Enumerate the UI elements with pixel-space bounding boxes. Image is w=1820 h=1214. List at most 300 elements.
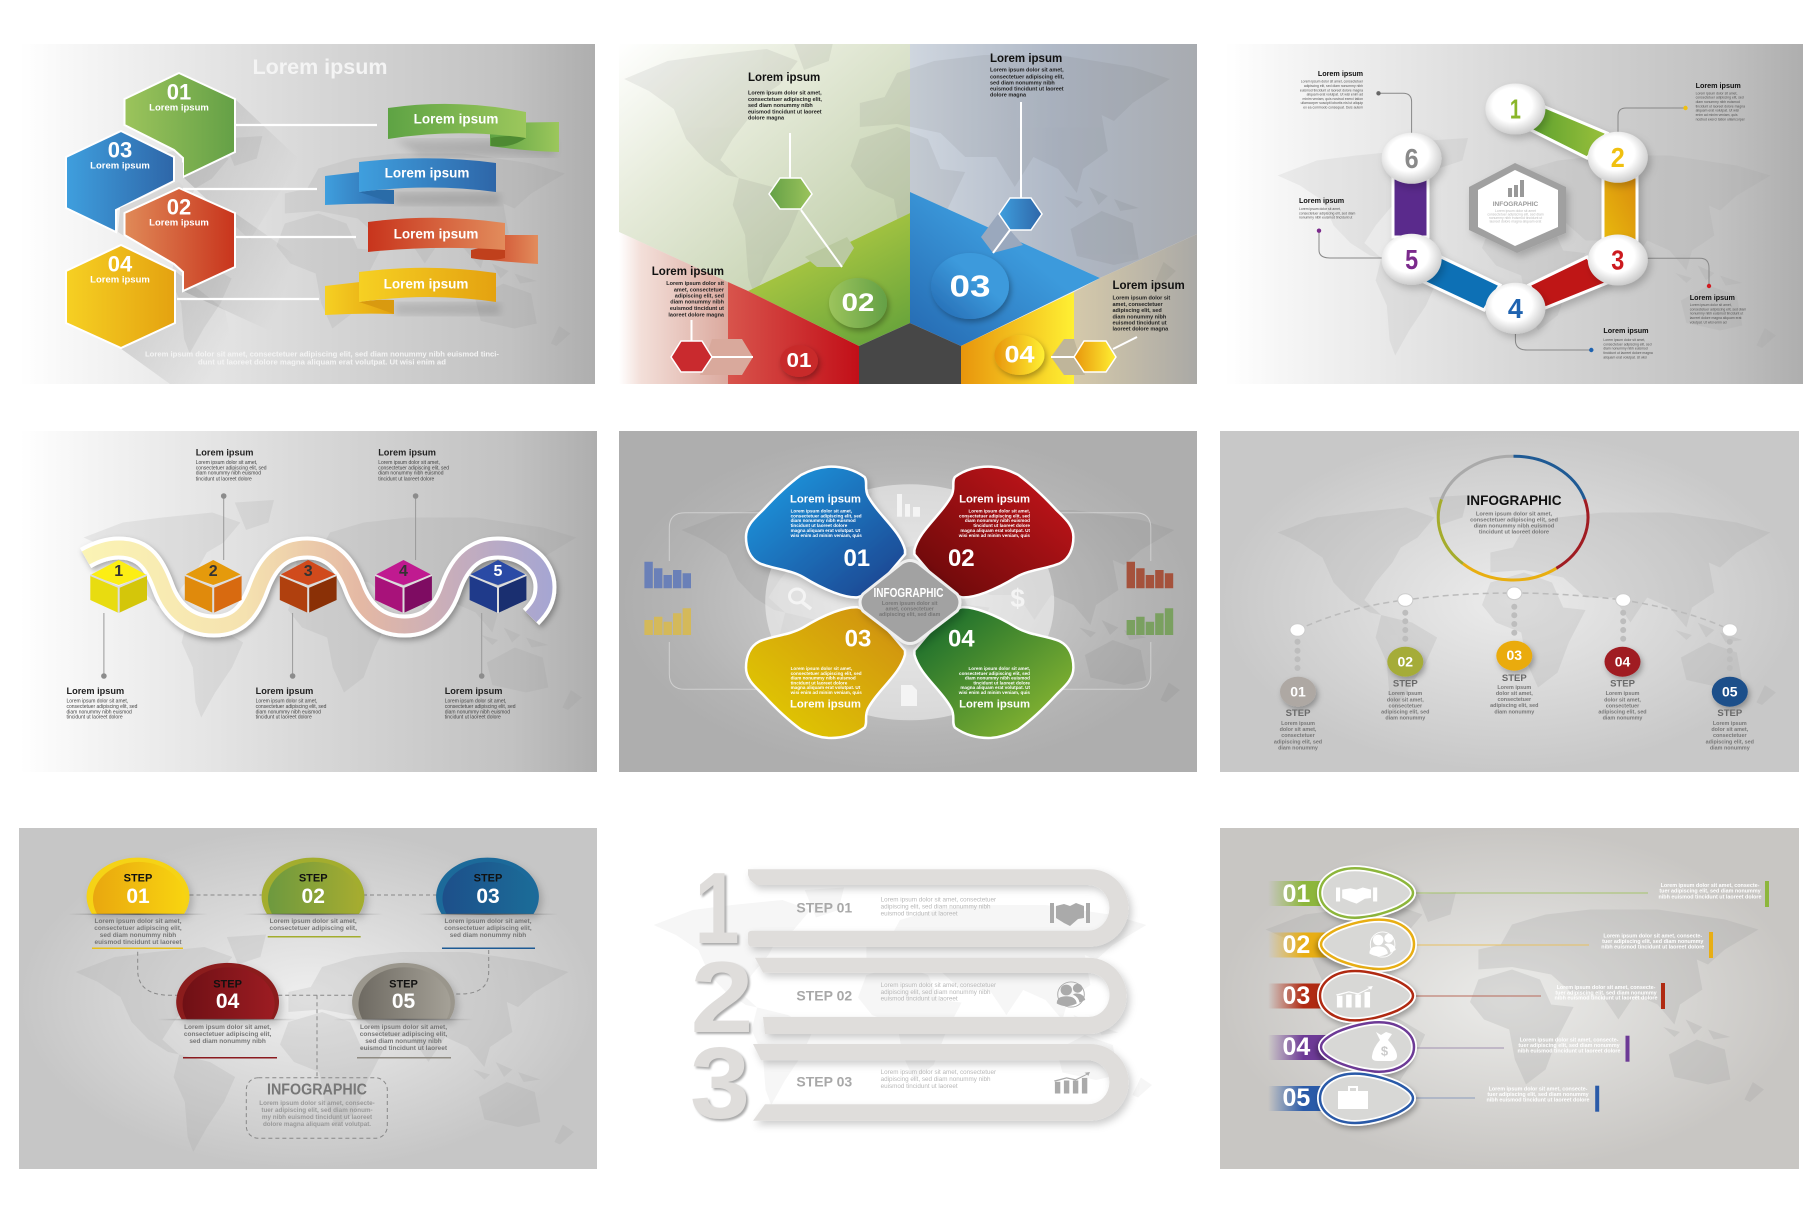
infographic note box: Lorem ipsum dolor sit amet, consecte- [259,1100,375,1107]
step 01: diam nonummy [1278,746,1318,752]
petal text 03: Lorem ipsum dolor sit amet, [791,666,852,671]
centre diamond: Lorem ipsum dolor sit [882,601,938,607]
cube 1: 1 [114,563,123,580]
step 05: adipiscing elit, sed [1706,739,1754,745]
ribbon: blue: Lorem ipsum [385,166,469,180]
ring text: INFOGRAPHIC [1466,492,1562,508]
side frame [669,513,1151,689]
step 03 text: euismod tincidunt ut laoreet [881,1083,958,1090]
row 05: Lorem ipsum dolor sit amet, consecte- [1489,1086,1588,1092]
callout 4: tincidunt ut laoreet dolore magna [1603,351,1653,355]
callout 2: diam nonummy nibh euismod [1696,100,1740,104]
text block 1 [66,686,138,721]
petal text 04: magna aliquam erat volutpat. Ut [960,685,1030,690]
text block: blue: dolore magna [990,93,1027,99]
petal text 02: magna aliquam erat volutpat. Ut [960,528,1030,533]
petal 01 [746,467,905,597]
step 01: 01 [1290,684,1306,700]
text block: yellow: Lorem ipsum dolor sit [1112,296,1170,302]
step 02: dolor sit amet, [1387,697,1424,703]
text block: yellow [1112,280,1185,333]
step 03 dome [418,858,558,949]
text block 2: tincidunt ut laoreet dolore [196,476,252,482]
arc nodes [1290,587,1737,636]
track 2: 2 [690,942,754,1054]
step 04 [1598,647,1647,722]
text block: green: consectetuer adipiscing elit, [748,97,822,103]
step 05 dome: 05 [392,990,415,1013]
callout 6: adipiscing elit, sed diam nonummy nibh [1304,84,1363,88]
text block 2: Lorem ipsum [196,448,253,458]
centre diamond: INFOGRAPHIC [874,585,944,600]
step 05: 05 [1722,684,1738,700]
callout 5: nonummy nibh euismod tincidunt ut [1299,216,1352,220]
hexagon 03 [66,131,183,232]
callout 3: nonummy nibh euismod tincidunt ut [1690,312,1743,316]
step 01: Lorem ipsum [1281,721,1315,727]
petal text 03: magna aliquam erat volutpat. Ut [791,685,861,690]
dotted stems [1294,604,1733,671]
petal 02 [914,467,1073,597]
panel: hexagonal cycle [1225,44,1803,384]
node 1 [1485,84,1545,134]
hexagon 02 [118,182,235,291]
step 04: dolor sit amet, [1604,697,1641,703]
petal text 04 [948,626,1030,710]
step 05 dome: Lorem ipsum dolor sit amet, [360,1024,447,1031]
callout 2: enim ad minim veniam, quis [1696,113,1738,117]
step 02 dome: 02 [302,885,325,908]
badge 03: 03 [950,268,990,304]
footer text: dunt ut laoreet dolore magna aliquam erat volutpat. Ut wisi enim ad [198,360,446,366]
ribbon: orange [368,218,538,264]
icon: money bag: $ [1381,1044,1389,1058]
hexagon 04 [66,245,175,348]
callout 3: Lorem ipsum [1690,293,1735,302]
callout 4: Lorem ipsum [1603,326,1649,335]
callout 2: consectetuer adipiscing elit, sed [1696,96,1744,100]
petal text 04: consectetuer adipiscing elit, sed [959,671,1030,676]
callout 2 [1696,81,1746,121]
step 03 text: STEP 03 [796,1074,852,1090]
node 1: 1 [1510,94,1521,124]
text block: green: dolore magna [748,115,785,121]
row 04: nibh euismod tincidunt ut laoreet dolore [1517,1048,1621,1054]
ribbon: orange: Lorem ipsum [394,226,478,242]
step 01: dolor sit amet, [1280,727,1317,733]
text block: yellow: adipiscing elit, sed [1112,308,1162,314]
infographic note box: dolore magna aliquam erat volutpat. [263,1121,371,1128]
callout 2: nostrud exerci tation ullamcorper [1696,117,1746,121]
step 05 dome: sed diam nonummy nibh [365,1038,442,1045]
text block 4 [378,448,449,482]
step 03: consectetuer [1498,697,1532,703]
callout 5: Lorem ipsum dolor sit amet, [1299,207,1341,211]
row 01: 01 [1282,880,1310,908]
text block 4: Lorem ipsum [378,448,436,458]
petal text 02 [948,493,1030,572]
ring text: consectetuer adipiscing elit, sed [1470,517,1558,523]
step 01 dome: sed diam nonummy nibh [100,932,176,939]
step 02 text [796,982,996,1003]
icons on the disc: $ [1010,583,1025,613]
cube 5 [470,560,526,613]
ribbon: yellow: Lorem ipsum [384,276,468,292]
text block: blue: consectetuer adipiscing elit, [990,74,1064,80]
connector: green hexagon [769,133,854,267]
leader lines [101,493,485,679]
cube 2: 2 [209,563,218,580]
text block: green: Lorem ipsum dolor sit amet, [748,90,822,96]
petal text 04: 04 [948,626,975,652]
step 01: consectetuer [1281,733,1316,739]
callout 3: volutpat. Ut wisi enim ad [1690,320,1727,324]
panel: step domes [19,828,597,1169]
callout 2: tincidunt ut laoreet dolore magna [1696,104,1745,108]
leader dots [1317,91,1711,352]
text block: blue: sed diam nonummy nibh [990,80,1055,86]
row 02: tuer adipiscing elit, sed diam nonummy [1602,939,1703,945]
callout 4: diam nonummy nibh euismod [1603,347,1648,351]
badge 01: 01 [786,350,812,372]
petal text 01: Lorem ipsum [790,493,861,505]
badge 01 [780,345,818,377]
step 01: adipiscing elit, sed [1274,739,1322,745]
petal text 03: wisi enim ad minim veniam, quis [790,690,862,695]
step 05: consectetuer [1713,733,1747,739]
step 03 dome: 03 [476,885,500,908]
hexagon 01: Lorem ipsum [149,102,209,114]
node 5: 5 [1405,244,1418,275]
background faces [619,44,1197,384]
text block 5: Lorem ipsum dolor sit amet, [445,699,506,705]
ribbon: green: Lorem ipsum [414,112,498,126]
step 04: Lorem ipsum [1606,691,1640,697]
step 02: diam nonummy [1385,716,1425,722]
step 05 dome: STEP [389,978,418,990]
callout 6: Lorem ipsum dolor sit amet, consectetuer [1301,80,1364,84]
step 01 text: STEP 01 [796,900,852,916]
step 03 text [796,1069,996,1090]
callout 5: Lorem ipsum [1299,196,1344,205]
row 03: Lorem ipsum dolor sit amet, consecte- [1557,985,1656,991]
text block 4: Lorem ipsum dolor sit amet, [378,460,440,466]
text block 5 [445,686,516,721]
ring [1438,456,1588,580]
text block 3: Lorem ipsum dolor sit amet, [256,699,317,705]
row 03: nibh euismod tincidunt ut laoreet dolore [1554,996,1658,1002]
track 3: 3 [690,1028,750,1140]
step 04: diam nonummy [1603,716,1642,722]
step 03: diam nonummy [1494,709,1534,715]
callout 4: Lorem ipsum dolor sit amet, [1603,338,1645,342]
track 3 [690,1028,1129,1140]
step 02 dome: STEP [299,872,328,884]
petal text 03: 03 [845,626,871,652]
text block: blue: euismod tincidunt ut laoreet [990,86,1064,92]
panel: four petals [619,431,1197,772]
step 04 dome: STEP [213,978,242,990]
centre hexagon [1469,163,1566,253]
petal text 01: consectetuer adipiscing elit, sed [791,514,862,518]
step 04: 04 [1615,654,1630,670]
cycle bands [1393,107,1637,310]
cube 4 [375,560,432,613]
step 02 text: Lorem ipsum dolor sit amet, consectetuer [881,982,996,989]
step 02 [1381,647,1429,722]
text block: yellow: laoreet dolore magna [1112,327,1169,333]
text block: green [748,72,822,121]
node 6 [1382,133,1442,184]
petal text 01: diam nonummy nibh euismod [791,518,856,523]
step 03 dome: Lorem ipsum dolor sit amet, [444,918,532,925]
step 02: STEP [1393,678,1418,690]
step 01 text [796,896,996,918]
petal text 03: tincidunt ut laoreet dolore [791,680,848,686]
centre diamond [860,560,960,644]
step 02 text: STEP 02 [796,987,852,1003]
callout 3: consectetuer adipiscing elit, sed diam [1690,307,1746,311]
petal text 01: tincidunt ut laoreet dolore [791,523,848,528]
bar chart: yellow [644,608,691,635]
hexagon 01 [124,73,235,177]
text block 5: Lorem ipsum [445,686,502,696]
step 04: consectetuer [1606,703,1640,709]
step 05 dome: euismod tincidunt ut laoreet [360,1045,448,1052]
infographic note box [246,1078,387,1138]
footer text [145,352,500,366]
connector: yellow hexagon [1051,337,1137,375]
petal text 04: Lorem ipsum [959,698,1030,710]
cube 2 [185,560,242,613]
callout 6: minim veniam, quis nostrud exerci tation [1302,97,1363,101]
hexagon 03: Lorem ipsum [90,160,150,172]
text block 1: Lorem ipsum dolor sit amet, [66,699,128,705]
step 04 dome: consectetuer adipiscing elit, [184,1031,271,1038]
dashed arc [1298,593,1730,630]
step 01: STEP [1286,708,1311,719]
wave ribbon [86,548,545,626]
callout 6: Lorem ipsum [1318,69,1363,78]
centre diamond: amet, consectetuer [886,606,934,612]
row 02: nibh euismod tincidunt ut laoreet dolore [1601,944,1704,950]
long shadows of the hexagons [120,99,300,384]
petal text 02: 02 [948,545,975,572]
text block 3 [256,686,327,721]
text block: red: Lorem ipsum [652,266,724,278]
text block: green: Lorem ipsum [748,72,820,84]
row 04: Lorem ipsum dolor sit amet, consecte- [1520,1038,1619,1044]
hexagon 02: 02 [167,194,191,220]
text block: blue [990,53,1064,99]
text block: yellow: euismod tincidunt ut [1112,321,1167,327]
text block 1: tincidunt ut laoreet dolore [66,715,123,721]
text block 3: tincidunt ut laoreet dolore [256,715,312,721]
text block 1: diam nonummy nibh euismod [66,709,132,715]
panel: four coloured faces [619,34,1197,384]
callout 4: consectetuer adipiscing elit, sed [1603,342,1652,346]
callout 3: laoreet dolore magna aliquam erat [1690,316,1742,320]
cube 5: 5 [494,563,503,580]
step 03 text: adipiscing elit, sed diam nonummy nibh [881,1076,991,1083]
hexagon 03: 03 [108,138,132,162]
petal text 03: Lorem ipsum [790,698,861,710]
callout 6: aliquam erat volutpat. Ut wisi enim ad [1307,93,1363,97]
petal text 04: tincidunt ut laoreet dolore [973,680,1030,686]
callout 6: euismod tincidunt ut laoreet dolore magna [1300,88,1363,92]
centre hexagon: Lorem ipsum dolor sit amet [1495,209,1536,213]
step 01 dome [68,858,208,949]
step 05: STEP [1717,708,1743,719]
petal text 02: consectetuer adipiscing elit, sed [959,514,1030,518]
node 3 [1588,234,1648,286]
row 01 [1268,868,1769,918]
connector lines [177,125,377,299]
text block: green: euismod tincidunt ut laoreet [748,109,822,115]
step 04: adipiscing elit, sed [1598,709,1647,715]
row 05: nibh euismod tincidunt ut laoreet dolore [1486,1098,1590,1104]
step 03 [1490,641,1538,715]
step 01 text: Lorem ipsum dolor sit amet, consectetuer [881,896,996,904]
coloured wedges [728,192,1100,384]
dashed connectors [138,895,489,1078]
text block 5: tincidunt ut laoreet dolore [445,715,501,721]
callout 4: aliquam erat volutpat. Ut wisi [1603,355,1647,359]
step 05: Lorem ipsum [1713,721,1747,727]
cube 4: 4 [399,563,408,580]
node 6: 6 [1405,143,1419,174]
callout 2: aliquam erat volutpat. Ut wisi [1696,109,1739,113]
panel: hexagons and ribbons [20,44,595,384]
step 05: dolor sit amet, [1711,727,1749,733]
step 03: adipiscing elit, sed [1490,703,1538,709]
step 03: STEP [1502,673,1527,684]
row 01: Lorem ipsum dolor sit amet, consecte- [1661,883,1760,889]
step 03 dome: sed diam nonummy nibh [450,932,526,939]
petal text 03 [790,626,871,710]
step 04: STEP [1610,678,1636,690]
badge 04: 04 [1004,342,1035,368]
step 05 dome [334,963,474,1058]
step 01 dome: STEP [124,872,152,884]
petal text 04: Lorem ipsum dolor sit amet, [968,666,1030,671]
ring text: Lorem ipsum dolor sit amet, [1476,511,1552,517]
text block 5: consectetuer adipiscing elit, sed [445,704,516,710]
infographic note box: INFOGRAPHIC [267,1082,367,1098]
icon: people [1057,982,1085,1007]
node 3: 3 [1611,244,1624,276]
step 02 text: adipiscing elit, sed diam nonummy nibh [881,989,991,996]
text block 1: consectetuer adipiscing elit, sed [66,704,138,710]
step 04 dome: sed diam nonummy nibh [189,1038,266,1045]
text block: yellow: diam nonummy nibh [1112,314,1167,320]
node 4 [1485,283,1545,334]
cube 3: 3 [304,563,313,580]
petal text 02: Lorem ipsum [959,493,1030,505]
hexagon 01: 01 [167,80,191,104]
text block: yellow: Lorem ipsum [1112,280,1185,292]
hexagon 02: Lorem ipsum [149,218,209,228]
hexagon 04: Lorem ipsum [90,274,150,286]
step 04 dome: Lorem ipsum dolor sit amet, [184,1024,271,1031]
callout 6: ex ea commodo consequat. Duis autem [1303,105,1363,109]
text block 3: diam nonummy nibh euismod [256,709,321,715]
heading: Lorem ipsum [252,55,388,79]
row 03: tuer adipiscing elit, sed diam nonummy [1555,990,1657,996]
step 02 dome: consectetuer adipiscing elit, [269,925,357,932]
step 01 dome: 01 [126,885,150,908]
petal text 01: magna aliquam erat volutpat. Ut [791,528,861,533]
petal text 01: Lorem ipsum dolor sit amet, [791,508,852,514]
step 01 dome: euismod tincidunt ut laoreet [94,939,182,946]
cube 3 [280,560,337,613]
callout 4 [1603,326,1653,359]
callout 3: Lorem ipsum dolor sit amet, [1690,303,1732,307]
row 02: 02 [1282,931,1310,959]
text block 3: Lorem ipsum [256,686,313,696]
text block: green: sed diam nonummy nibh [748,103,813,109]
connector: red hexagon [671,320,753,375]
petal text 03: consectetuer adipiscing elit, sed [791,671,862,676]
panel: wave with cubes [20,431,597,772]
text block 2: consectetuer adipiscing elit, sed [196,465,267,471]
ring text: tincidunt ut laoreet dolore [1479,530,1549,536]
bar chart: red [1127,562,1173,588]
callout 6 [1300,69,1364,109]
step 05: diam nonummy [1710,746,1750,752]
step 03: dolor sit amet, [1496,691,1533,697]
row 02 [1268,920,1713,969]
badge 02 [829,278,887,328]
step 05 dome: consectetuer adipiscing elit, [360,1031,447,1038]
text block 4: diam nonummy nibh euismod [378,471,444,477]
text block: red: amet, consectetuer [674,287,725,293]
bar chart: green [1127,608,1173,635]
track 2 [690,942,1127,1054]
petal text 01: wisi enim ad minim veniam, quis [790,533,862,538]
petal text 01: 01 [843,545,870,572]
text block 1: Lorem ipsum [66,686,124,696]
petal text 02: diam nonummy nibh euismod [965,518,1030,523]
centre hexagon: INFOGRAPHIC [1493,201,1539,208]
callout 5: consectetuer adipiscing elit, sed diam [1299,211,1356,215]
text block 5: diam nonummy nibh euismod [445,709,510,715]
text block 2: diam nonummy nibh euismod [196,471,261,477]
text block 4: tincidunt ut laoreet dolore [378,476,435,482]
step 03: 03 [1507,647,1522,663]
text block: blue: Lorem ipsum dolor sit amet, [990,68,1064,74]
petal text 04: wisi enim ad minim veniam, quis [958,690,1030,695]
node 4: 4 [1508,293,1523,324]
ribbon: blue [325,158,500,205]
step 03 dome: consectetuer adipiscing elit, [444,925,532,932]
ring text [1466,492,1562,536]
text block: yellow: amet, consectetuer [1112,302,1163,308]
icon: briefcase [1338,1086,1368,1109]
text block: blue: Lorem ipsum [990,53,1062,65]
row 04: tuer adipiscing elit, sed diam nonummy [1518,1043,1620,1049]
cube 1 [90,560,147,613]
centre diamond: adipiscing elit, sed diam [879,612,941,618]
text block 3: consectetuer adipiscing elit, sed [256,704,327,710]
row 05: 05 [1282,1084,1310,1112]
icon: handshake [1050,903,1090,926]
ribbon: green [388,104,559,156]
badge 03 [931,253,1009,319]
track 1: 1 [694,853,740,965]
row 02: Lorem ipsum dolor sit amet, consecte- [1603,934,1702,940]
petal text 01 [790,493,870,572]
